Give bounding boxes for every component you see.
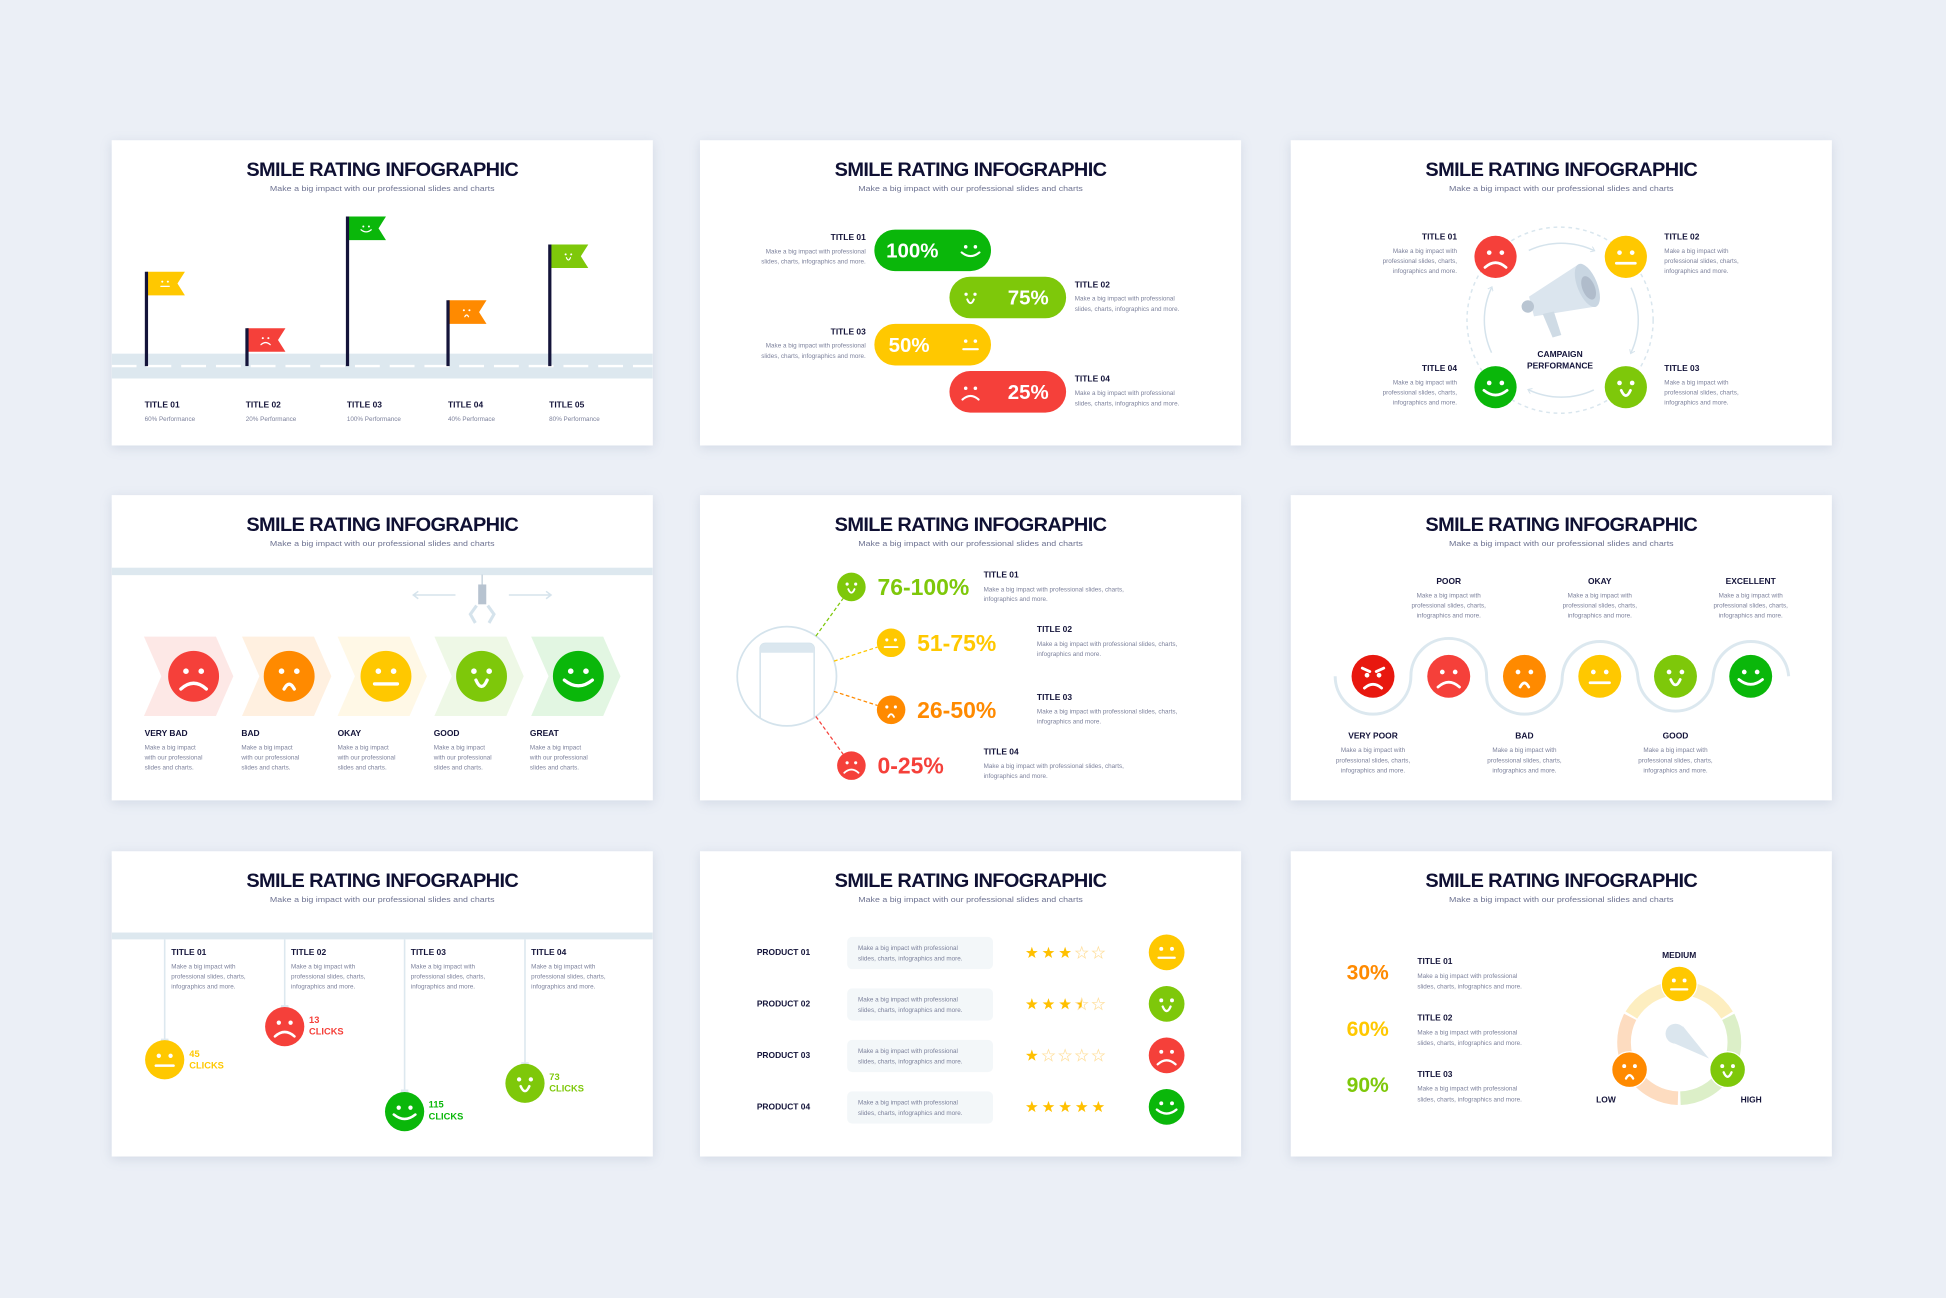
texts: TITLE 03: [1037, 692, 1072, 702]
labels: with our professional: [337, 754, 395, 761]
bottom labels: infographics and more.: [1492, 767, 1557, 774]
panel: pills: [700, 140, 1241, 445]
top labels: [1412, 576, 1788, 619]
texts: [761, 232, 1180, 407]
center label: PERFORMANCE: [1527, 361, 1593, 371]
top labels: infographics and more.: [1719, 612, 1783, 619]
title: SMILE RATING INFOGRAPHIC: [835, 514, 1107, 536]
texts: slides, charts, infographics and more.: [1417, 1096, 1522, 1103]
texts: professional slides, charts,: [411, 973, 485, 980]
product rows: slides, charts, infographics and more.: [858, 1058, 963, 1065]
flag 3: [348, 217, 386, 366]
labels: 20% Performance: [246, 416, 297, 423]
labels: slides and charts.: [434, 764, 483, 771]
bottom labels: GOOD: [1663, 730, 1688, 740]
ranges: 0-25%: [877, 753, 944, 779]
title: SMILE RATING INFOGRAPHIC: [1425, 870, 1697, 892]
product rows: slides, charts, infographics and more.: [858, 1007, 963, 1014]
title: SMILE RATING INFOGRAPHIC: [1425, 159, 1697, 181]
product rows: Make a big impact with professional: [858, 945, 958, 952]
top labels: Make a big impact with: [1568, 592, 1632, 599]
top labels: Make a big impact with: [1719, 592, 1783, 599]
texts: TITLE 02: [1075, 279, 1110, 289]
texts: Make a big impact with professional: [1417, 1086, 1517, 1093]
panel: chevrons: [112, 495, 653, 800]
percentages: 90%: [1347, 1074, 1389, 1097]
panel: flags: [112, 140, 653, 445]
percentages: [1347, 962, 1389, 1097]
subtitle: Make a big impact with our professional slides and charts: [858, 539, 1083, 548]
top labels: professional slides, charts,: [1412, 602, 1486, 609]
texts: slides, charts, infographics and more.: [1417, 1040, 1522, 1047]
texts: Make a big impact with professional slides, charts,: [1037, 709, 1178, 716]
texts: TITLE 01: [1417, 956, 1453, 966]
labels: Make a big impact: [338, 745, 389, 752]
labels: [144, 728, 588, 771]
labels: 100% Performance: [347, 416, 401, 423]
labels: Make a big impact: [241, 745, 293, 752]
labels: TITLE 04: [448, 400, 483, 410]
click counts: CLICKS: [549, 1083, 584, 1093]
product rows: slides, charts, infographics and more.: [858, 1110, 963, 1117]
labels: TITLE 01: [145, 400, 180, 410]
connectors: [816, 598, 877, 754]
bottom labels: VERY POOR: [1348, 730, 1398, 740]
product rows: PRODUCT 02: [757, 998, 810, 1008]
title: SMILE RATING INFOGRAPHIC: [835, 870, 1107, 892]
click counts: 45: [189, 1049, 200, 1059]
ring gauge: [1612, 966, 1745, 1098]
pill 75%: 75%: [1008, 287, 1049, 310]
texts: Make a big impact with professional slides, charts,: [984, 586, 1124, 593]
subtitle: Make a big impact with our professional slides and charts: [270, 184, 495, 193]
texts: professional slides, charts,: [1664, 390, 1739, 397]
texts: professional slides, charts,: [1383, 390, 1457, 397]
texts: infographics and more.: [171, 983, 236, 990]
texts: Make a big impact with professional: [1417, 973, 1517, 980]
texts: professional slides, charts,: [1383, 258, 1457, 265]
product rows: Make a big impact with professional: [858, 996, 958, 1003]
product rows: Make a big impact with professional: [858, 1099, 958, 1106]
faces: [1352, 655, 1772, 698]
texts: TITLE 02: [1664, 231, 1700, 241]
labels: TITLE 03: [347, 400, 382, 410]
texts: infographics and more.: [291, 983, 356, 990]
title: SMILE RATING INFOGRAPHIC: [246, 870, 518, 892]
texts: infographics and more.: [1037, 651, 1101, 658]
bottom labels: professional slides, charts,: [1487, 758, 1562, 765]
texts: TITLE 02: [291, 947, 326, 957]
pill 100%: 100%: [886, 239, 939, 262]
pill 50%: [874, 324, 991, 365]
labels: Make a big impact: [434, 745, 485, 752]
texts: professional slides, charts,: [171, 973, 246, 980]
icon: claw with arrows: [413, 575, 551, 623]
bottom labels: [1336, 730, 1713, 774]
faces: [1149, 935, 1185, 1125]
gauge labels: LOW: [1596, 1095, 1616, 1105]
texts: professional slides, charts,: [531, 973, 606, 980]
texts: Make a big impact with professional: [766, 343, 866, 350]
labels: TITLE 05: [549, 400, 585, 410]
top labels: professional slides, charts,: [1713, 602, 1788, 609]
labels: with our professional: [144, 754, 202, 761]
top labels: OKAY: [1588, 576, 1612, 586]
pill 75%: [949, 277, 1066, 318]
hanging strings: [165, 939, 525, 1091]
product rows: PRODUCT 04: [757, 1101, 810, 1111]
texts: TITLE 02: [1037, 624, 1072, 634]
subtitle: Make a big impact with our professional slides and charts: [1449, 184, 1674, 193]
texts: TITLE 03: [831, 326, 866, 336]
title: SMILE RATING INFOGRAPHIC: [835, 159, 1107, 181]
texts: infographics and more.: [1393, 400, 1457, 407]
texts: infographics and more.: [411, 983, 475, 990]
panel: wave: [1291, 495, 1832, 800]
chevrons with faces: [144, 637, 621, 716]
bottom labels: professional slides, charts,: [1638, 758, 1713, 765]
labels: 40% Performace: [448, 416, 496, 423]
texts: [984, 570, 1178, 780]
title: SMILE RATING INFOGRAPHIC: [246, 159, 518, 181]
click counts: [189, 1015, 584, 1121]
labels: with our professional: [433, 754, 492, 761]
texts: TITLE 01: [984, 570, 1019, 580]
texts: slides, charts, infographics and more.: [1075, 306, 1180, 313]
icon: phone circle: [736, 626, 838, 727]
pill 50%: 50%: [889, 334, 930, 357]
flag 1: [146, 272, 185, 366]
labels: slides and charts.: [338, 764, 387, 771]
pill 25%: 25%: [1008, 381, 1049, 404]
gauge labels: MEDIUM: [1662, 950, 1696, 960]
panel: products: [700, 851, 1241, 1157]
product rows: Make a big impact with professional: [858, 1048, 958, 1055]
texts: [1417, 956, 1522, 1103]
texts: Make a big impact with: [411, 964, 476, 971]
texts: TITLE 03: [411, 947, 446, 957]
click counts: CLICKS: [189, 1060, 224, 1070]
click counts: 13: [309, 1015, 319, 1025]
texts: Make a big impact with professional: [1417, 1029, 1517, 1036]
product rows: PRODUCT 03: [757, 1050, 810, 1060]
flag 4: [448, 300, 487, 366]
labels: with our professional: [240, 754, 299, 761]
cycle arrows: [1484, 243, 1638, 397]
bottom labels: Make a big impact with: [1643, 747, 1708, 754]
labels: Make a big impact: [145, 745, 196, 752]
texts: Make a big impact with professional slides, charts,: [1037, 641, 1178, 648]
labels: with our professional: [529, 754, 588, 761]
texts: Make a big impact with: [1664, 380, 1729, 387]
subtitle: Make a big impact with our professional slides and charts: [858, 184, 1083, 193]
subtitle: Make a big impact with our professional slides and charts: [858, 895, 1083, 904]
texts: slides, charts, infographics and more.: [761, 259, 866, 266]
bottom labels: infographics and more.: [1643, 767, 1708, 774]
labels: GREAT: [530, 728, 560, 738]
labels: slides and charts.: [530, 764, 579, 771]
center label: [1527, 349, 1593, 371]
texts: TITLE 02: [1417, 1013, 1453, 1023]
texts: Make a big impact with professional: [1075, 390, 1175, 397]
center label: CAMPAIGN: [1537, 349, 1583, 359]
panel: clicks: [112, 851, 653, 1157]
texts: TITLE 04: [1422, 363, 1457, 373]
product rows: PRODUCT 01: [757, 947, 810, 957]
subtitle: Make a big impact with our professional slides and charts: [270, 539, 495, 548]
texts: Make a big impact with: [1393, 380, 1458, 387]
texts: Make a big impact with: [171, 964, 236, 971]
product rows: [757, 937, 993, 1124]
pill 25%: [949, 371, 1066, 413]
bottom labels: professional slides, charts,: [1336, 758, 1410, 765]
bottom labels: BAD: [1515, 730, 1534, 740]
road: [112, 354, 653, 378]
bottom labels: Make a big impact with: [1341, 747, 1406, 754]
gauge labels: [1596, 950, 1762, 1105]
top labels: POOR: [1436, 576, 1461, 586]
texts: infographics and more.: [984, 596, 1048, 603]
texts: infographics and more.: [1664, 400, 1729, 407]
top labels: professional slides, charts,: [1563, 602, 1637, 609]
subtitle: Make a big impact with our professional slides and charts: [270, 895, 495, 904]
texts: [1383, 231, 1739, 407]
texts: Make a big impact with professional slides, charts,: [984, 763, 1124, 770]
texts: Make a big impact with: [291, 964, 356, 971]
texts: slides, charts, infographics and more.: [1417, 983, 1522, 990]
labels: [145, 400, 600, 423]
texts: TITLE 03: [1664, 363, 1700, 373]
ranges: 76-100%: [877, 574, 969, 600]
texts: infographics and more.: [1393, 268, 1457, 275]
bottom labels: Make a big impact with: [1492, 747, 1557, 754]
pill 100%: [874, 230, 991, 271]
icon: megaphone: [1522, 260, 1605, 338]
click counts: 115: [429, 1100, 444, 1110]
panel: phone ranges: [700, 495, 1241, 800]
texts: TITLE 01: [171, 947, 207, 957]
texts: TITLE 01: [831, 232, 866, 242]
ranges: 26-50%: [917, 697, 996, 723]
bottom labels: infographics and more.: [1341, 767, 1405, 774]
faces: [1474, 236, 1647, 408]
click counts: CLICKS: [429, 1111, 463, 1121]
texts: [171, 947, 606, 990]
texts: Make a big impact with: [1664, 248, 1729, 255]
labels: 80% Performance: [549, 416, 600, 423]
texts: slides, charts, infographics and more.: [1075, 400, 1180, 407]
texts: TITLE 04: [531, 947, 567, 957]
labels: GOOD: [434, 728, 460, 738]
texts: Make a big impact with professional: [766, 248, 866, 255]
percentages: 30%: [1347, 962, 1389, 985]
ranges: [837, 573, 996, 780]
click counts: 73: [549, 1072, 560, 1082]
texts: slides, charts, infographics and more.: [761, 353, 866, 360]
panel: gauge: [1291, 851, 1832, 1157]
texts: TITLE 04: [984, 746, 1019, 756]
labels: slides and charts.: [145, 764, 194, 771]
subtitle: Make a big impact with our professional slides and charts: [1449, 539, 1674, 548]
labels: VERY BAD: [145, 728, 188, 738]
texts: infographics and more.: [1037, 718, 1101, 725]
labels: BAD: [241, 728, 260, 738]
texts: TITLE 01: [1422, 231, 1457, 241]
percentages: 60%: [1347, 1018, 1389, 1041]
top labels: infographics and more.: [1568, 612, 1632, 619]
title: SMILE RATING INFOGRAPHIC: [246, 514, 518, 536]
panel: campaign: [1291, 140, 1832, 445]
texts: infographics and more.: [984, 773, 1048, 780]
top labels: Make a big impact with: [1417, 592, 1481, 599]
ranges: 51-75%: [917, 630, 996, 656]
gauge labels: HIGH: [1741, 1095, 1762, 1105]
texts: infographics and more.: [1664, 268, 1729, 275]
labels: Make a big impact: [530, 745, 581, 752]
labels: OKAY: [338, 728, 362, 738]
top labels: EXCELLENT: [1726, 576, 1777, 586]
flag 2: [247, 328, 285, 366]
labels: 60% Performance: [145, 416, 196, 423]
hanging faces: [145, 1005, 545, 1131]
labels: slides and charts.: [241, 764, 291, 771]
texts: TITLE 04: [1075, 374, 1110, 384]
click counts: CLICKS: [309, 1026, 344, 1036]
texts: Make a big impact with: [1393, 248, 1458, 255]
texts: Make a big impact with professional: [1075, 296, 1175, 303]
texts: professional slides, charts,: [291, 973, 366, 980]
product rows: slides, charts, infographics and more.: [858, 955, 963, 962]
flag 5: [550, 244, 588, 366]
texts: professional slides, charts,: [1664, 258, 1739, 265]
texts: TITLE 03: [1417, 1069, 1453, 1079]
texts: infographics and more.: [531, 983, 596, 990]
labels: TITLE 02: [246, 400, 281, 410]
texts: Make a big impact with: [531, 964, 596, 971]
title: SMILE RATING INFOGRAPHIC: [1425, 514, 1697, 536]
top labels: infographics and more.: [1417, 612, 1481, 619]
star ratings: [1026, 947, 1104, 1112]
subtitle: Make a big impact with our professional slides and charts: [1449, 895, 1674, 904]
